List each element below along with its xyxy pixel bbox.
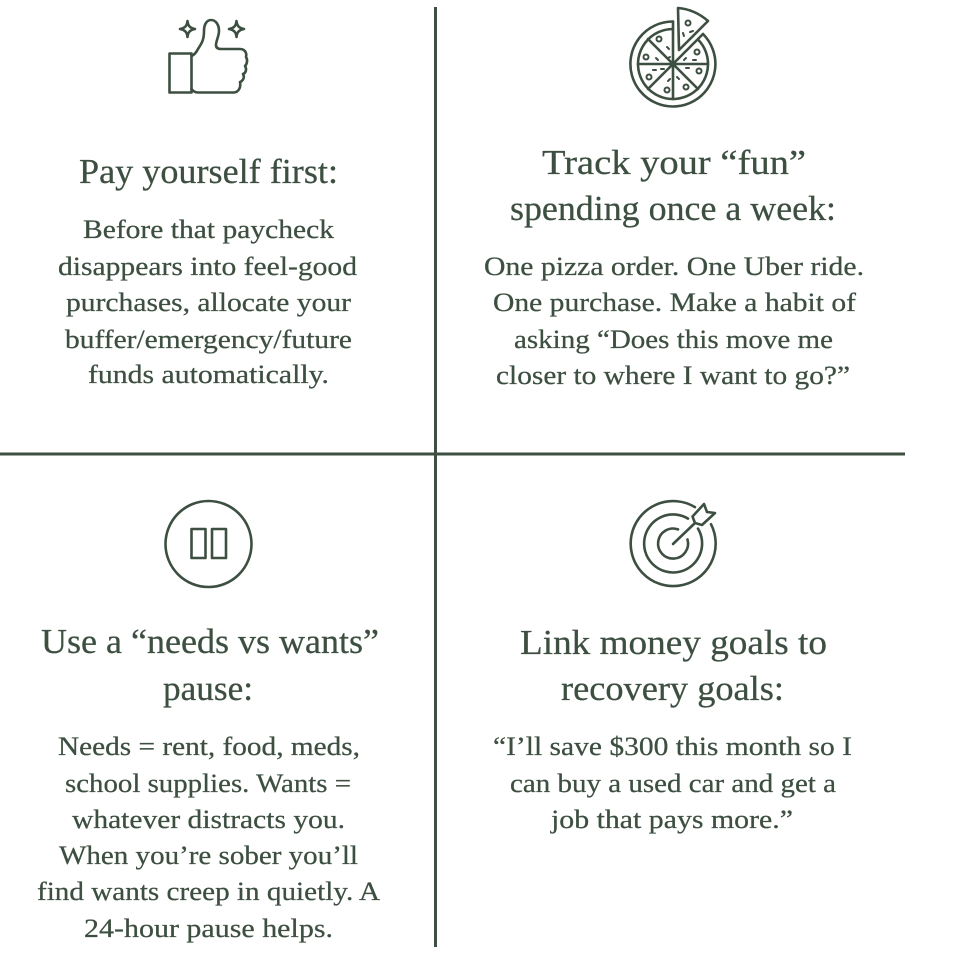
heading: pause: (163, 670, 253, 708)
icon: pause button (166, 501, 252, 587)
body text: whatever distracts you. (72, 804, 345, 834)
heading (520, 624, 827, 708)
body text: One purchase. Make a habit of (493, 287, 856, 317)
body text (484, 251, 864, 390)
body text: purchases, allocate your (66, 287, 351, 317)
body text: Needs = rent, food, meds, (58, 731, 360, 761)
heading: Pay yourself first: (79, 153, 338, 191)
body text: closer to where I want to go?” (496, 360, 850, 390)
body text: When you’re sober you’ll (59, 840, 358, 870)
panel: link money goals (493, 501, 852, 834)
icon: target with arrow (631, 501, 716, 586)
body text: find wants creep in quietly. A (37, 876, 380, 906)
body text (37, 731, 380, 943)
icon: thumbs up (170, 20, 247, 92)
heading (510, 144, 836, 228)
body text (493, 731, 852, 834)
body text: asking “Does this move me (514, 324, 833, 354)
body text: school supplies. Wants = (65, 768, 351, 798)
body text: “I’ll save $300 this month so I (493, 731, 852, 761)
heading: spending once a week: (510, 190, 836, 228)
heading: Track your “fun” (542, 144, 806, 182)
body text: funds automatically. (88, 359, 329, 389)
panel: needs vs wants pause (37, 501, 380, 943)
icon: pizza (630, 8, 715, 106)
body text: 24-hour pause helps. (84, 913, 333, 943)
body text: buffer/emergency/future (65, 324, 352, 354)
body text: job that pays more.” (550, 804, 793, 834)
heading: Link money goals to (520, 624, 827, 662)
body text: One pizza order. One Uber ride. (484, 251, 864, 281)
body text: can buy a used car and get a (510, 768, 836, 798)
body text: disappears into feel-good (58, 251, 357, 281)
panel: pay yourself first (58, 20, 357, 389)
body text: Before that paycheck (83, 214, 335, 244)
panel: track fun spending (484, 8, 864, 390)
heading (41, 623, 379, 708)
heading: Use a “needs vs wants” (41, 623, 379, 661)
body text (58, 214, 357, 389)
heading: recovery goals: (561, 670, 784, 708)
